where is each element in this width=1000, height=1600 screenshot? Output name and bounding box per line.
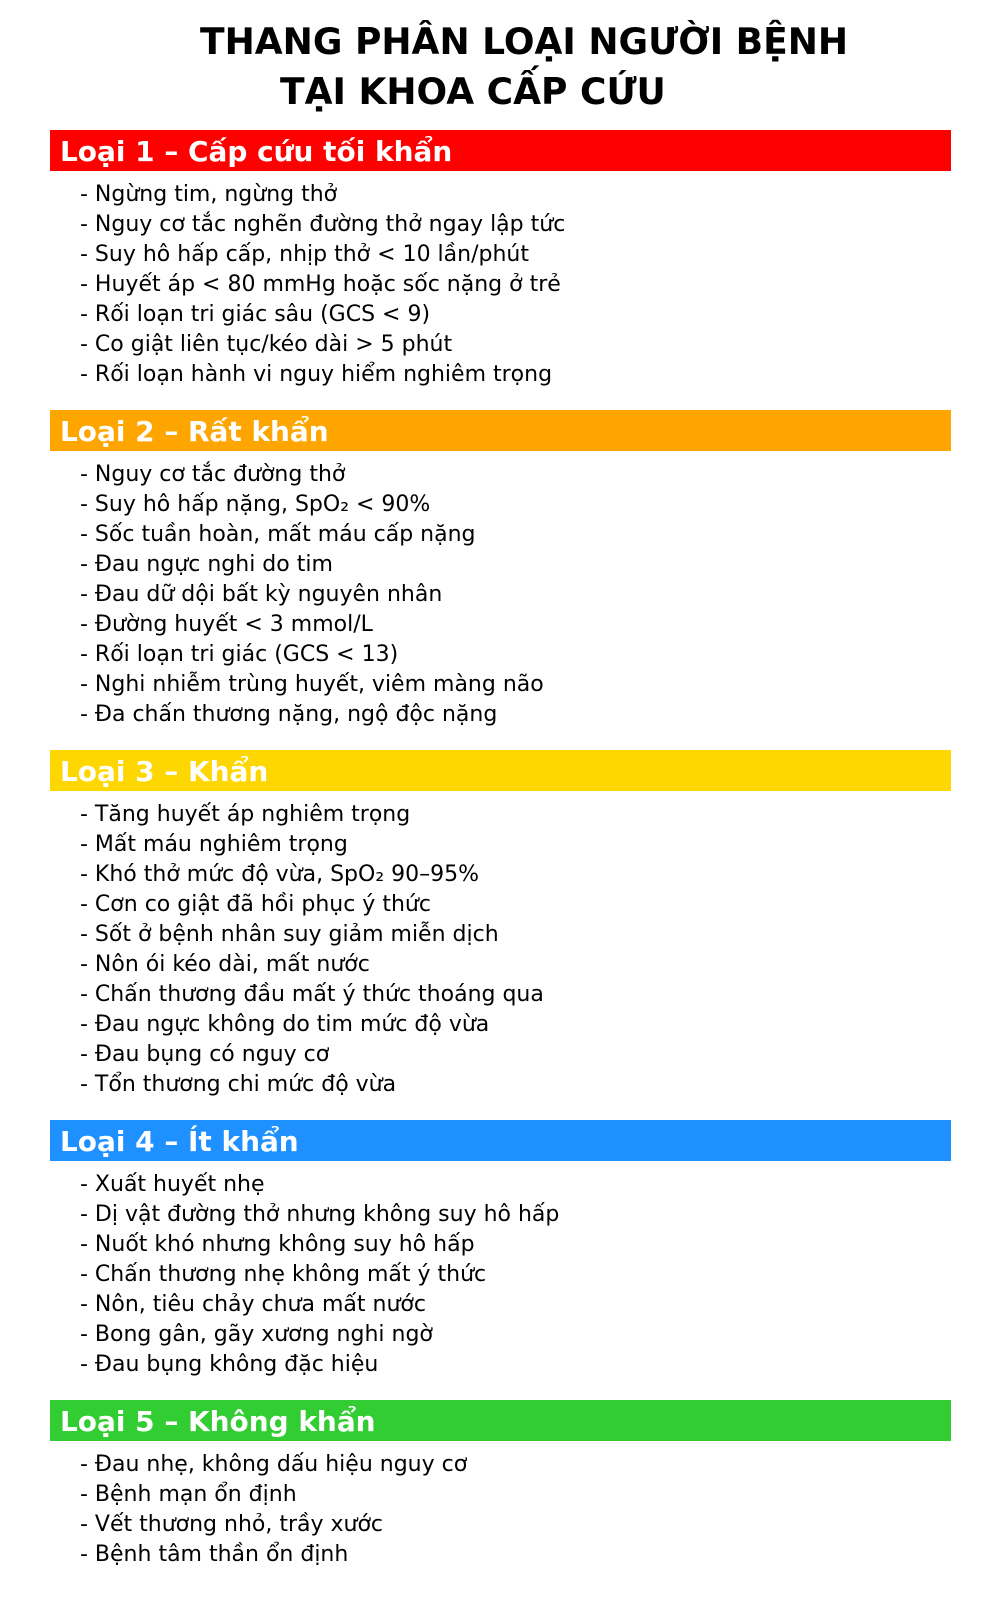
heading: Loại 5: Loại 5 – Không khẩn <box>60 1404 376 1438</box>
panel: Loại 2 <box>50 410 951 727</box>
list: Loại 4: - Bong gân, gãy xương nghi ngờ <box>80 1322 433 1347</box>
panel: Loại 5 <box>50 1400 951 1567</box>
title <box>200 20 848 113</box>
list: Loại 3: - Nôn ói kéo dài, mất nước <box>80 952 370 977</box>
heading: Loại 1: Loại 1 – Cấp cứu tối khẩn <box>60 134 452 168</box>
list: Loại 1: - Ngừng tim, ngừng thở <box>80 182 338 207</box>
list: Loại 1: - Suy hô hấp cấp, nhịp thở < 10 lần/phút <box>80 242 529 267</box>
list: Loại 3 <box>80 802 544 1097</box>
list: Loại 4: - Xuất huyết nhẹ <box>80 1172 265 1197</box>
list: Loại 1: - Rối loạn tri giác sâu (GCS < 9) <box>80 302 430 327</box>
list: Loại 3: - Sốt ở bệnh nhân suy giảm miễn dịch <box>80 921 499 947</box>
list: Loại 5: - Bệnh tâm thần ổn định <box>80 1542 348 1567</box>
list: Loại 5: - Vết thương nhỏ, trầy xước <box>80 1512 383 1537</box>
list: Loại 2: - Rối loạn tri giác (GCS < 13) <box>80 642 398 667</box>
panel: Loại 3 <box>50 750 951 1097</box>
list: Loại 4: - Nôn, tiêu chảy chưa mất nước <box>80 1292 426 1317</box>
list: Loại 3: - Tổn thương chi mức độ vừa <box>80 1072 396 1097</box>
heading: Loại 2: Loại 2 – Rất khẩn <box>60 414 329 448</box>
list: Loại 3: - Cơn co giật đã hồi phục ý thức <box>80 892 431 917</box>
list: Loại 1 <box>80 182 565 387</box>
list: Loại 4: - Dị vật đường thở nhưng không suy hô hấp <box>80 1202 559 1227</box>
list: Loại 3: - Đau bụng có nguy cơ <box>80 1042 330 1067</box>
heading: Loại 3 <box>50 750 951 791</box>
heading: Loại 3: Loại 3 – Khẩn <box>60 754 268 788</box>
list: Loại 3: - Tăng huyết áp nghiêm trọng <box>80 802 410 827</box>
list: Loại 2: - Nghi nhiễm trùng huyết, viêm màng não <box>80 671 544 697</box>
title: THANG PHÂN LOẠI NGƯỜI BỆNH <box>200 20 848 63</box>
list: Loại 2: - Đa chấn thương nặng, ngộ độc nặng <box>80 702 497 727</box>
list: Loại 4: - Đau bụng không đặc hiệu <box>80 1352 378 1377</box>
list: Loại 2: - Nguy cơ tắc đường thở <box>80 462 346 487</box>
list: Loại 1: - Rối loạn hành vi nguy hiểm nghiêm trọng <box>80 362 552 387</box>
heading: Loại 1 <box>50 130 951 171</box>
list: Loại 3: - Khó thở mức độ vừa, SpO₂ 90–95% <box>80 862 479 887</box>
list: Loại 4 <box>80 1172 559 1377</box>
list: Loại 3: - Mất máu nghiêm trọng <box>80 832 348 857</box>
list: Loại 5: - Bệnh mạn ổn định <box>80 1482 297 1507</box>
title: TẠI KHOA CẤP CỨU <box>280 66 666 113</box>
panel: Loại 1 <box>50 130 951 387</box>
list: Loại 4: - Nuốt khó nhưng không suy hô hấp <box>80 1232 475 1257</box>
heading: Loại 2 <box>50 410 951 451</box>
list: Loại 2 <box>80 462 544 727</box>
list: Loại 1: - Nguy cơ tắc nghẽn đường thở ngay lập tức <box>80 212 565 237</box>
list: Loại 3: - Đau ngực không do tim mức độ vừa <box>80 1012 489 1037</box>
heading: Loại 4: Loại 4 – Ít khẩn <box>60 1124 299 1158</box>
list: Loại 2: - Sốc tuần hoàn, mất máu cấp nặng <box>80 522 476 547</box>
list: Loại 2: - Đường huyết < 3 mmol/L <box>80 612 374 637</box>
list: Loại 2: - Đau dữ dội bất kỳ nguyên nhân <box>80 582 442 607</box>
list: Loại 2: - Đau ngực nghi do tim <box>80 552 333 577</box>
list: Loại 2: - Suy hô hấp nặng, SpO₂ < 90% <box>80 492 430 517</box>
heading: Loại 5 <box>50 1400 951 1441</box>
list: Loại 4: - Chấn thương nhẹ không mất ý thức <box>80 1262 486 1287</box>
panel: Loại 4 <box>50 1120 951 1377</box>
list: Loại 3: - Chấn thương đầu mất ý thức thoáng qua <box>80 982 544 1007</box>
list: Loại 1: - Co giật liên tục/kéo dài > 5 phút <box>80 332 452 357</box>
heading: Loại 4 <box>50 1120 951 1161</box>
list: Loại 5: - Đau nhẹ, không dấu hiệu nguy cơ <box>80 1452 468 1477</box>
list: Loại 1: - Huyết áp < 80 mmHg hoặc sốc nặng ở trẻ <box>80 272 561 297</box>
list: Loại 5 <box>80 1452 468 1567</box>
